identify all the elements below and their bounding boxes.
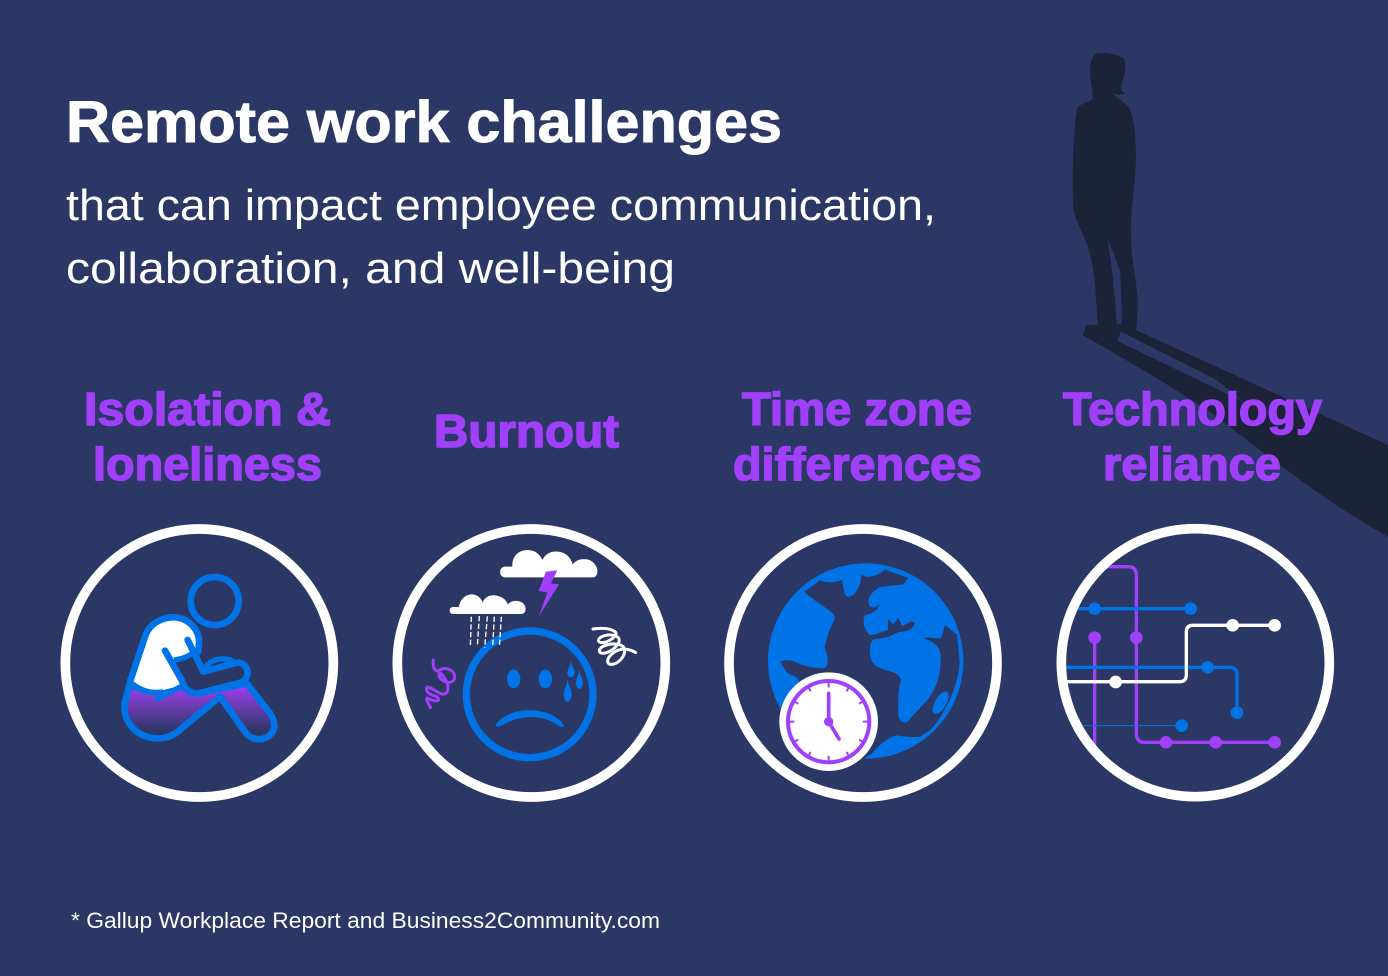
- globe: [768, 563, 963, 762]
- blue lines: [1077, 607, 1185, 610]
- subtitle: collaboration, and well-being: [66, 244, 675, 293]
- heading: isolation and loneliness: loneliness: [93, 438, 322, 490]
- heading: technology reliance: [1063, 383, 1322, 490]
- icon: isolated seated person: [65, 529, 333, 797]
- heading: time zone differences: Time zone: [742, 383, 972, 435]
- subtitle: that can impact employee communication,: [66, 181, 936, 230]
- purple scribble: [426, 660, 455, 708]
- circuit nodes: [1088, 602, 1281, 749]
- icon: technology circuit lines: [1058, 529, 1329, 797]
- purple lines: [1098, 567, 1275, 742]
- footnote: * Gallup Workplace Report and Business2Community.com: [71, 908, 660, 933]
- storm cloud: [500, 550, 597, 577]
- heading: burnout: Burnout: [434, 405, 619, 457]
- subtitle: [66, 181, 936, 293]
- heading: isolation and loneliness: Isolation &: [84, 383, 331, 435]
- white scribble: [593, 628, 636, 664]
- heading: technology reliance: reliance: [1103, 438, 1281, 490]
- heading: time zone differences: differences: [733, 438, 982, 490]
- icon: globe with clock: [729, 529, 997, 797]
- heading: time zone differences: [733, 383, 982, 490]
- clock: [779, 672, 878, 771]
- white line: [1058, 625, 1275, 682]
- silhouette: person and long shadow: [1073, 53, 1388, 537]
- rain: [470, 616, 501, 648]
- heading: technology reliance: Technology: [1063, 383, 1322, 435]
- sad face: [466, 631, 593, 758]
- title: Remote work challenges: [66, 90, 782, 155]
- lightning bolt: [539, 570, 559, 616]
- rain cloud: [450, 594, 526, 614]
- heading: isolation and loneliness: [84, 383, 331, 490]
- icon: burnout sad face with storm clouds: [397, 529, 665, 797]
